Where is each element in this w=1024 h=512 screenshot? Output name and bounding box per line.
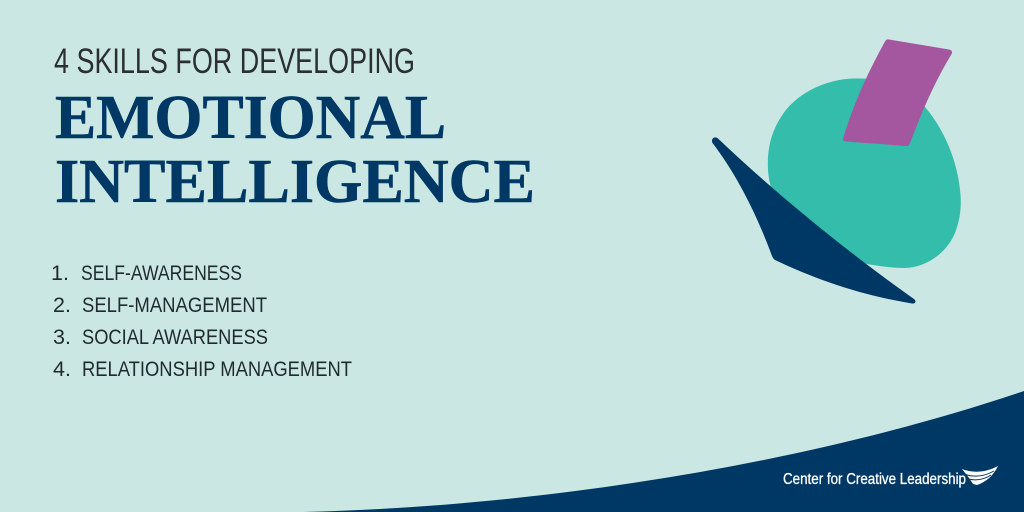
title: main heading <box>55 84 535 216</box>
title: main heading: INTELLIGENCE <box>55 148 535 216</box>
logo wordmark: Center for Creative Leadership <box>783 471 966 488</box>
numbered list of skills: 1. <box>51 261 69 285</box>
graphic: abstract shapes <box>712 39 961 304</box>
numbered list of skills: 3. <box>53 325 71 349</box>
numbered list of skills: 4. <box>53 357 71 381</box>
logo: wing icon <box>962 466 998 485</box>
numbered list of skills: RELATIONSHIP MANAGEMENT <box>82 357 352 381</box>
numbered list of skills: 2. <box>53 293 71 317</box>
footer: logo <box>783 466 998 488</box>
shape: teal blob <box>768 78 961 268</box>
numbered list of skills <box>51 261 352 381</box>
title: main heading: EMOTIONAL <box>55 84 446 152</box>
shape: purple parallelogram <box>843 39 952 146</box>
shape: navy wedge <box>712 137 915 304</box>
footer: navy curved band <box>303 391 1024 512</box>
title: kicker line: 4 SKILLS FOR DEVELOPING <box>54 42 415 81</box>
numbered list of skills: SELF-AWARENESS <box>81 261 242 285</box>
numbered list of skills: SOCIAL AWARENESS <box>82 325 268 349</box>
numbered list of skills: SELF-MANAGEMENT <box>82 293 267 317</box>
